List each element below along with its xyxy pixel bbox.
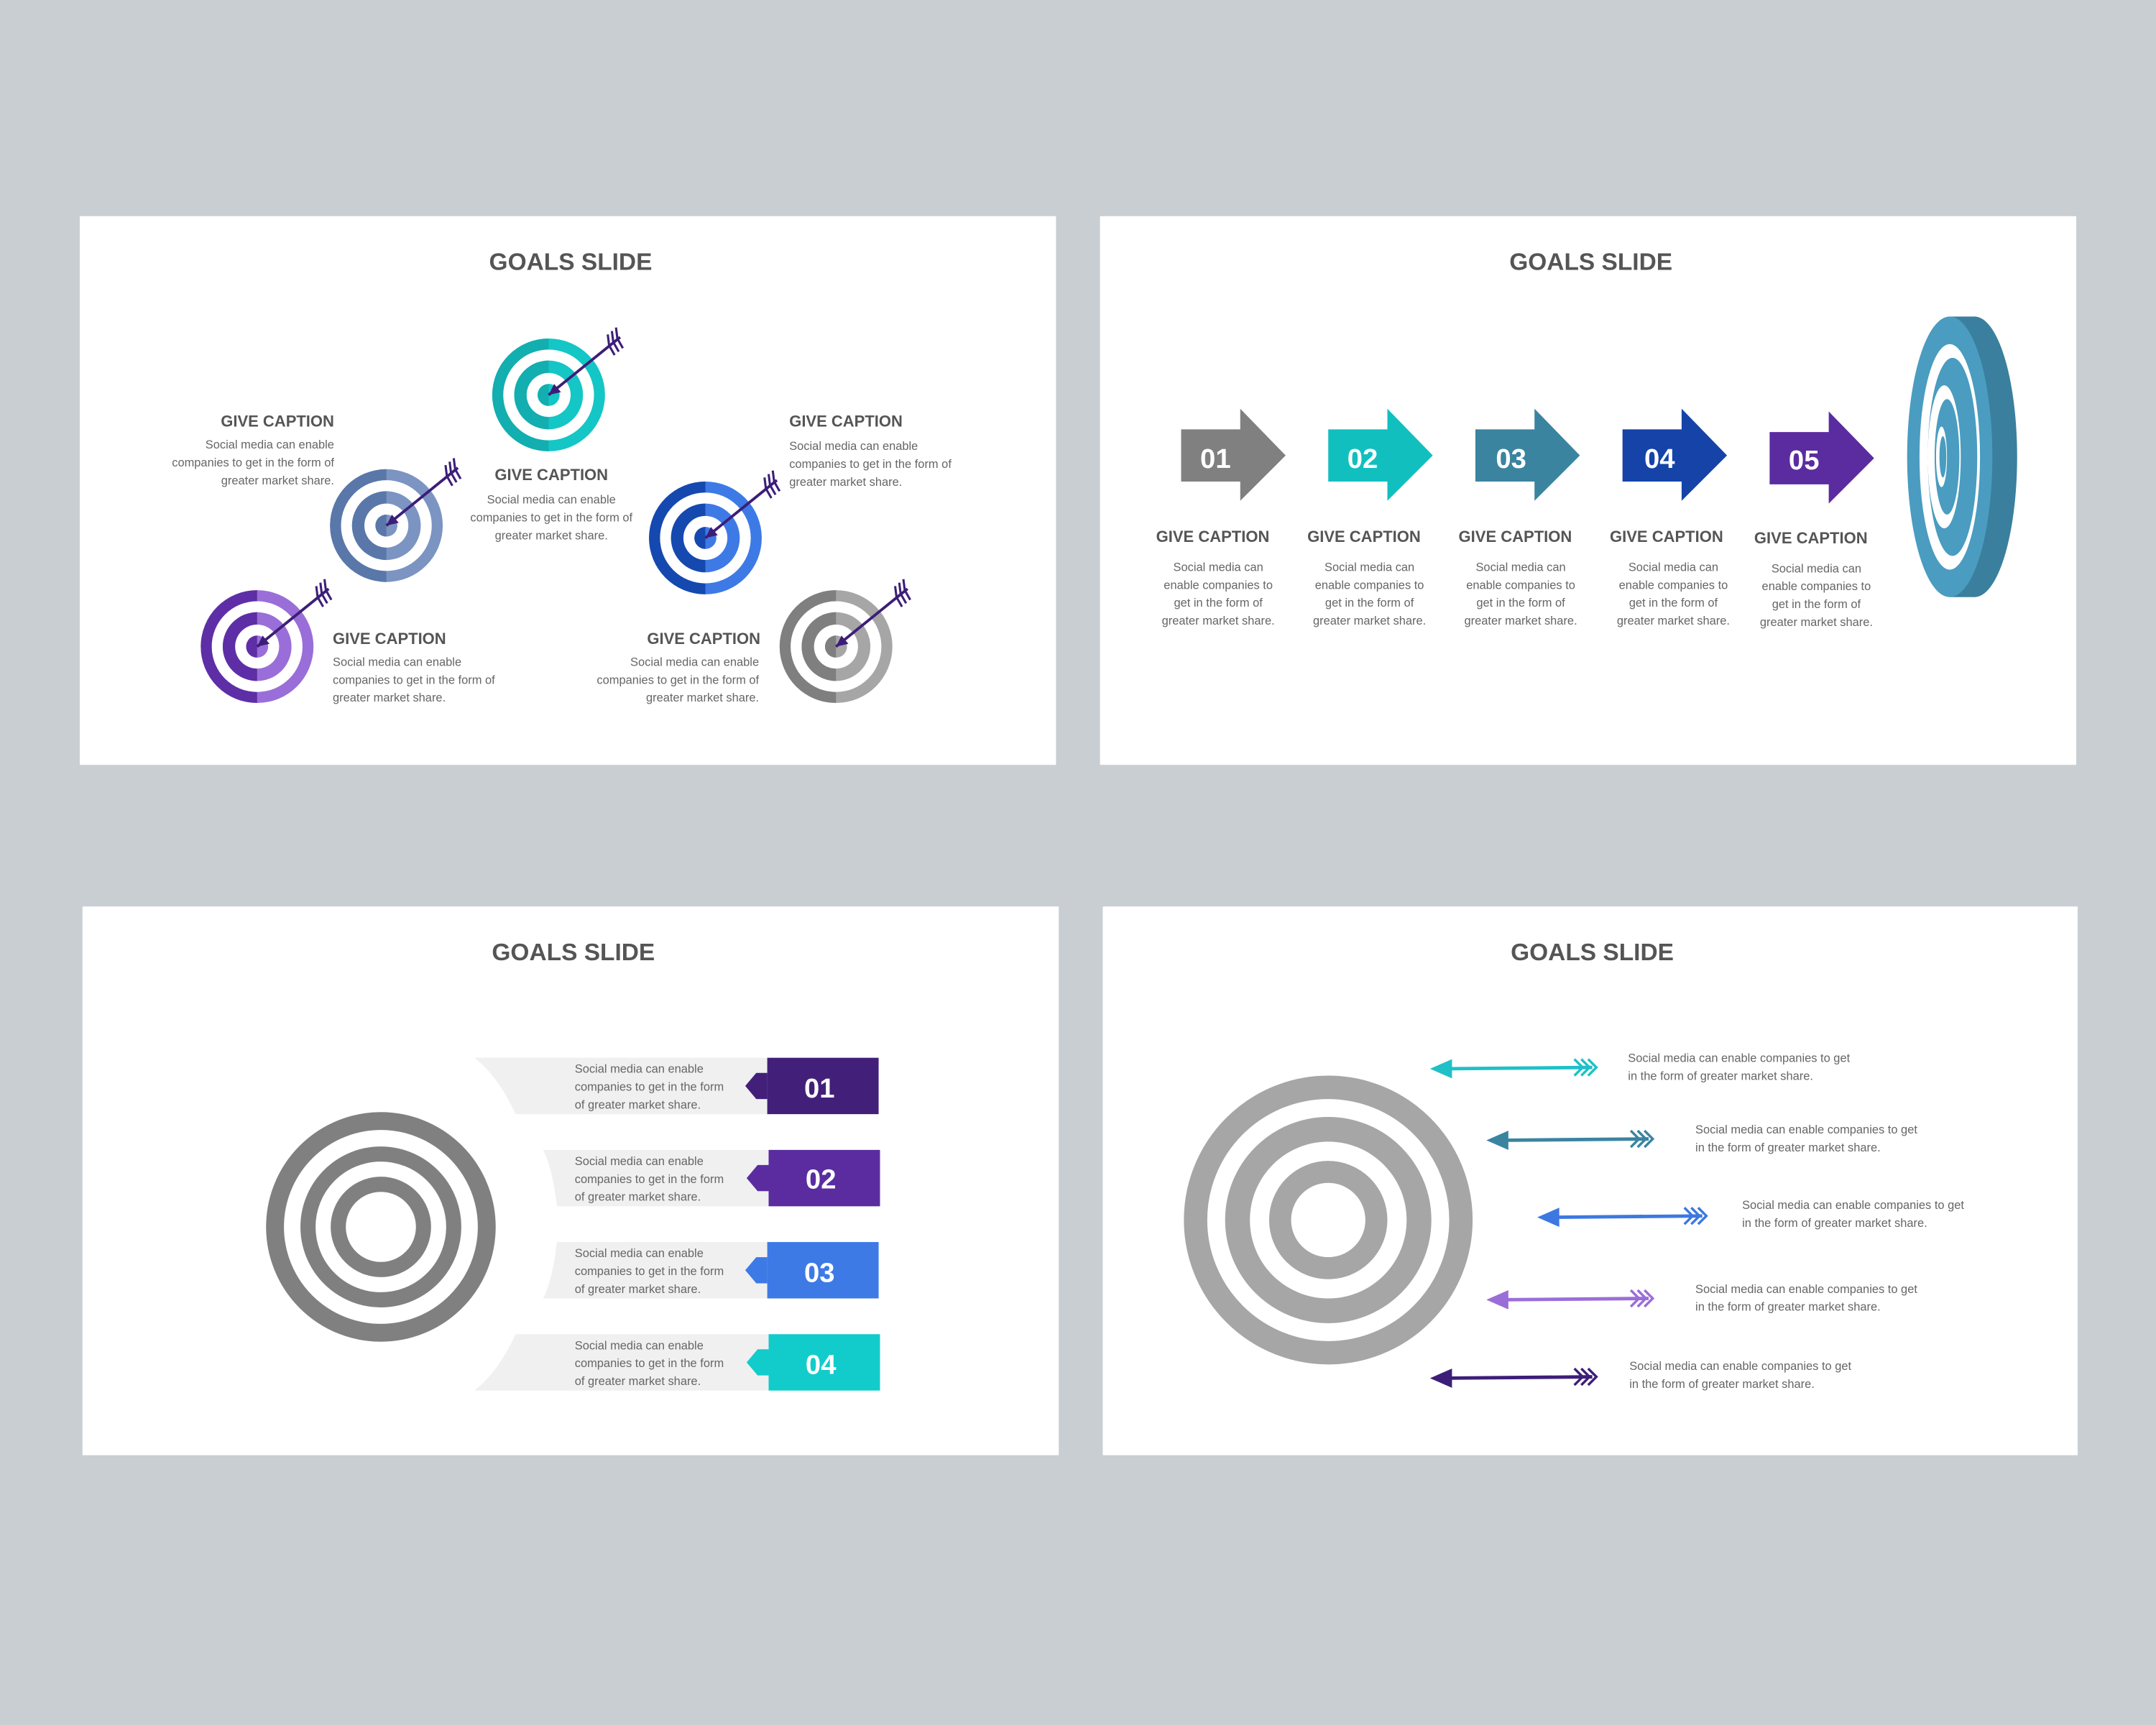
captions: greater market share.	[1313, 615, 1426, 627]
captions: get in the form of	[1325, 597, 1414, 610]
banner 04	[474, 1334, 880, 1391]
panel: arrows to target	[1102, 906, 2078, 1455]
captions: enable companies to	[1315, 579, 1424, 592]
arrow 02: 02	[1348, 443, 1378, 474]
banner 01: 01	[804, 1073, 835, 1104]
captions: Social media can	[1628, 561, 1718, 574]
banner 02: of greater market share.	[575, 1191, 701, 1204]
title: GOALS SLIDE	[1509, 249, 1672, 275]
caption: top left: Social media can enable	[206, 438, 334, 451]
captions: enable companies to	[1164, 579, 1273, 592]
arrow 1	[1430, 1059, 1596, 1078]
caption: center: GIVE CAPTION	[494, 466, 608, 484]
caption: top left	[172, 412, 334, 487]
captions: get in the form of	[1476, 597, 1565, 610]
banner 03: Social media can enable	[575, 1247, 704, 1260]
title: GOALS SLIDE	[1511, 939, 1674, 966]
captions: Social media can	[1772, 562, 1861, 575]
banner 04: 04	[806, 1350, 837, 1381]
panel: target captions	[80, 216, 1056, 765]
caption: bottom left	[333, 630, 495, 704]
texts: Social media can enable companies to get	[1628, 1052, 1851, 1064]
banner 03: companies to get in the form	[575, 1265, 724, 1278]
caption: top right	[789, 412, 952, 489]
caption: top right: Social media can enable	[789, 440, 918, 453]
arrow 02	[1328, 409, 1433, 501]
caption: bottom left: Social media can enable	[333, 656, 461, 668]
texts: Social media can enable companies to get	[1629, 1360, 1852, 1373]
caption: bottom right	[596, 630, 760, 704]
banner 01: companies to get in the form	[575, 1081, 724, 1094]
captions: greater market share.	[1760, 616, 1873, 629]
banner 04: Social media can enable	[575, 1339, 704, 1352]
captions	[1156, 528, 1873, 629]
caption: bottom right: greater market share.	[646, 691, 759, 704]
caption: bottom left: greater market share.	[333, 691, 446, 704]
caption: center: companies to get in the form of	[470, 512, 632, 525]
captions: GIVE CAPTION	[1754, 529, 1868, 547]
captions: GIVE CAPTION	[1307, 528, 1421, 546]
caption: top left: companies to get in the form of	[172, 456, 334, 469]
arrow 4	[1486, 1290, 1653, 1310]
texts: in the form of greater market share.	[1695, 1141, 1881, 1154]
texts: in the form of greater market share.	[1695, 1301, 1881, 1314]
icon: blue target	[649, 471, 780, 594]
arrow 2	[1486, 1131, 1653, 1150]
icon: large gray target	[1196, 1087, 1461, 1353]
caption: top right: GIVE CAPTION	[789, 412, 903, 430]
arrow 03	[1475, 409, 1580, 501]
icon: slate target	[330, 459, 461, 582]
icon: 3D target	[1907, 316, 2017, 597]
caption: top right: greater market share.	[789, 476, 902, 489]
banner 03: of greater market share.	[575, 1283, 701, 1296]
texts: in the form of greater market share.	[1742, 1217, 1927, 1230]
captions: GIVE CAPTION	[1156, 528, 1269, 546]
banner 01	[474, 1058, 879, 1114]
banner 02: companies to get in the form	[575, 1173, 724, 1186]
captions: get in the form of	[1772, 598, 1861, 611]
texts	[1628, 1052, 1964, 1391]
caption: bottom right: GIVE CAPTION	[647, 630, 760, 648]
banner 02: 02	[806, 1164, 836, 1195]
arrow 04: 04	[1644, 443, 1675, 474]
icon: teal target	[492, 328, 623, 451]
captions: get in the form of	[1174, 597, 1263, 610]
captions: enable companies to	[1619, 579, 1728, 592]
caption: center	[470, 466, 632, 542]
captions: get in the form of	[1629, 597, 1718, 610]
arrow 05: 05	[1789, 445, 1819, 476]
banner 04: of greater market share.	[575, 1375, 701, 1388]
captions: Social media can	[1325, 561, 1414, 574]
arrow 04	[1623, 409, 1727, 501]
caption: top left: greater market share.	[221, 474, 334, 487]
caption: top left: GIVE CAPTION	[221, 412, 334, 430]
caption: bottom left: GIVE CAPTION	[333, 630, 446, 648]
texts: in the form of greater market share.	[1629, 1378, 1815, 1391]
banner 03	[543, 1242, 879, 1299]
captions: greater market share.	[1162, 615, 1275, 627]
caption: bottom right: Social media can enable	[630, 656, 759, 668]
texts: Social media can enable companies to get	[1695, 1123, 1917, 1136]
caption: bottom left: companies to get in the form of	[333, 673, 495, 686]
captions: GIVE CAPTION	[1459, 528, 1572, 546]
banner 02	[543, 1150, 880, 1206]
icon: gray target	[780, 579, 911, 703]
arrow 03: 03	[1496, 443, 1526, 474]
icon: gray target	[275, 1121, 487, 1333]
banner 01: of greater market share.	[575, 1098, 701, 1111]
captions: greater market share.	[1465, 615, 1577, 627]
arrow 01: 01	[1200, 443, 1231, 474]
banner 01: Social media can enable	[575, 1063, 704, 1076]
arrow 3	[1537, 1208, 1706, 1227]
texts: Social media can enable companies to get	[1742, 1199, 1964, 1212]
title: GOALS SLIDE	[492, 939, 655, 966]
title: GOALS SLIDE	[489, 249, 652, 275]
caption: top right: companies to get in the form of	[789, 458, 952, 471]
captions: Social media can	[1475, 561, 1566, 574]
panel: numbered banners	[83, 906, 1059, 1455]
banner 03: 03	[804, 1258, 835, 1289]
banner 02: Social media can enable	[575, 1155, 704, 1168]
captions: greater market share.	[1617, 615, 1730, 627]
caption: center: Social media can enable	[487, 494, 616, 507]
caption: bottom right: companies to get in the form of	[596, 673, 760, 686]
captions: enable companies to	[1466, 579, 1575, 592]
panel: arrow steps	[1100, 216, 2076, 765]
icon: purple target	[201, 579, 331, 703]
texts: Social media can enable companies to get	[1695, 1283, 1917, 1296]
caption: center: greater market share.	[495, 529, 608, 542]
arrow 5	[1430, 1368, 1596, 1388]
texts: in the form of greater market share.	[1628, 1070, 1813, 1082]
arrow 05	[1769, 411, 1874, 504]
captions: Social media can	[1174, 561, 1263, 574]
captions: enable companies to	[1762, 580, 1871, 593]
captions: GIVE CAPTION	[1610, 528, 1723, 546]
arrow 01	[1181, 409, 1286, 501]
banner 04: companies to get in the form	[575, 1357, 724, 1370]
